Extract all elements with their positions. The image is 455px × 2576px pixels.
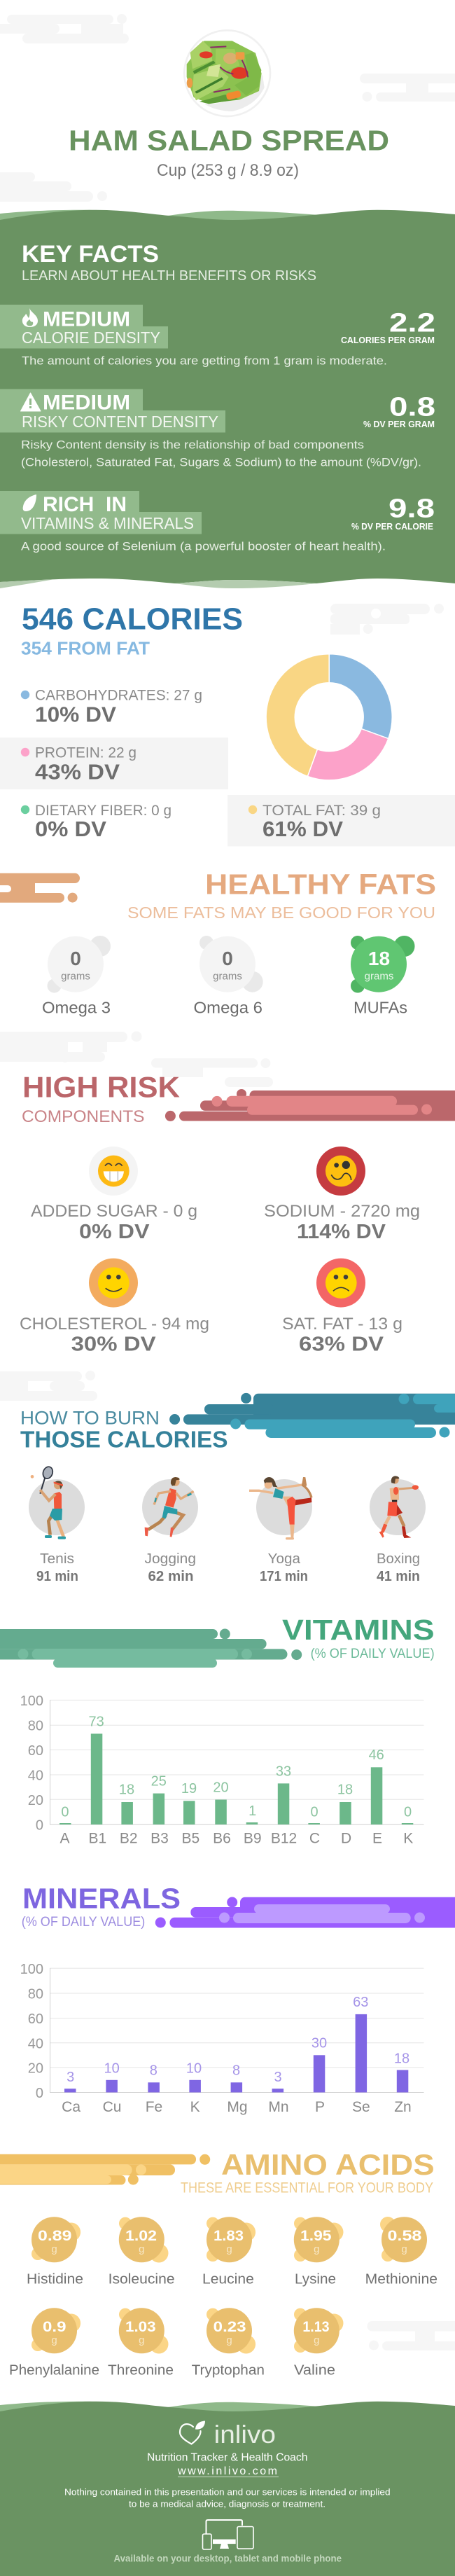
- bar chart: vitamins: B9: [244, 1831, 262, 1847]
- value: 9.8: [388, 494, 435, 524]
- bar chart: vitamins: B3: [150, 1831, 169, 1847]
- fat: mufas: [351, 936, 414, 1016]
- amino: histidine: [27, 2217, 83, 2287]
- stat: total fat: [248, 803, 381, 841]
- bar chart: vitamins: [20, 1694, 424, 1847]
- activity: tennis: [29, 1465, 85, 1539]
- component: cholesterol: 30% DV: [71, 1334, 156, 1356]
- stat: carbohydrates: 10% DV: [35, 702, 116, 727]
- bar chart: vitamins: 1: [248, 1803, 256, 1819]
- label: CALORIE DENSITY: [22, 328, 160, 347]
- stat: total fat: 61% DV: [262, 817, 343, 841]
- component: sodium: [264, 1147, 420, 1243]
- label: boxing: Boxing: [377, 1551, 420, 1567]
- bar chart: vitamins: B6: [213, 1831, 231, 1847]
- availability note: Available on your desktop, tablet and mobile phone: [113, 2554, 342, 2564]
- fat: omega 6: Omega 6: [193, 998, 262, 1016]
- heading: calories: 546 CALORIES: [22, 602, 243, 637]
- tagline: Nutrition Tracker & Health Coach: [147, 2451, 308, 2463]
- unit: CALORIES PER GRAM: [341, 335, 435, 345]
- bar chart: vitamins: A: [59, 1831, 70, 1847]
- fat: omega 6: [193, 936, 263, 1016]
- bar chart: minerals: Cu: [103, 2099, 121, 2115]
- amino: tryptophan: g: [226, 2334, 232, 2346]
- stat: carbohydrates: [21, 688, 202, 727]
- amino: phenylalanine: 0.9: [43, 2319, 66, 2335]
- bar chart: minerals: 8: [150, 2063, 158, 2079]
- bar chart: minerals: [20, 1962, 424, 2115]
- bar chart: vitamins: 60: [28, 1743, 43, 1759]
- label: RISKY CONTENT DENSITY: [22, 413, 218, 431]
- label: jogging: Jogging: [144, 1551, 196, 1567]
- bar chart: vitamins: 100: [20, 1694, 43, 1709]
- subheading: LEARN ABOUT HEALTH BENEFITS OR RISKS: [22, 268, 316, 284]
- amino: lysine: g: [314, 2243, 319, 2255]
- description: [21, 438, 421, 469]
- bar chart: minerals: 10: [104, 2061, 120, 2076]
- icon: flame: [22, 308, 38, 327]
- logo: heart and leaf: [180, 2421, 205, 2444]
- activity: boxing: [370, 1476, 426, 1538]
- heading: high risk: HIGH RISK: [22, 1070, 180, 1103]
- amino: threonine: 1.03: [125, 2319, 156, 2335]
- logo wordmark: inlivo: [214, 2420, 276, 2449]
- stat: carbohydrates: CARBOHYDRATES: 27 g: [35, 688, 202, 703]
- description: Risky Content density is the relationship of bad components: [21, 438, 364, 452]
- decorative cloud: amber: [0, 2154, 210, 2185]
- bar chart: minerals: 10: [186, 2061, 202, 2076]
- decorative cloud: teal: [169, 1393, 455, 1438]
- bar chart: minerals: K: [190, 2099, 200, 2115]
- label: jogging: 62 min: [148, 1569, 193, 1584]
- label: yoga: 171 min: [260, 1569, 308, 1584]
- amino: methionine: Methionine: [365, 2272, 438, 2287]
- bar chart: vitamins: 0: [36, 1818, 43, 1834]
- risky content block: [0, 389, 435, 469]
- bar chart: minerals: Mn: [268, 2099, 289, 2115]
- icon: devices: [203, 2520, 253, 2549]
- component: sodium: SODIUM - 2720 mg: [264, 1202, 420, 1221]
- fat: mufas: grams: [365, 971, 393, 983]
- bar chart: vitamins: 20: [28, 1793, 43, 1808]
- bar chart: vitamins: B1: [88, 1831, 106, 1847]
- bar chart: minerals: 60: [28, 2011, 43, 2027]
- fat: omega 6: grams: [213, 971, 242, 983]
- bar chart: vitamins: B2: [120, 1831, 138, 1847]
- bar chart: vitamins: 18: [119, 1782, 134, 1797]
- decorative cloud: red: [165, 1089, 455, 1121]
- heading: healthy fats: HEALTHY FATS: [205, 868, 436, 900]
- bar chart: vitamins: 19: [181, 1781, 197, 1796]
- amino: lysine: [294, 2217, 343, 2287]
- fat: mufas: MUFAs: [354, 998, 407, 1016]
- amino: threonine: [108, 2308, 174, 2378]
- amino: isoleucine: g: [139, 2243, 144, 2255]
- heading: minerals: MINERALS: [22, 1882, 181, 1914]
- description: A good source of Selenium (a powerful booster of heart health).: [21, 540, 386, 553]
- vitamins and minerals block: [0, 491, 435, 553]
- bar chart: vitamins: 40: [28, 1768, 43, 1783]
- heading: those calories: THOSE CALORIES: [20, 1426, 228, 1452]
- bar chart: minerals: Se: [352, 2099, 370, 2115]
- bar chart: minerals: 3: [274, 2070, 282, 2085]
- fat: omega 3: grams: [61, 971, 90, 983]
- panel: calories: [0, 602, 455, 846]
- amino: phenylalanine: g: [51, 2334, 57, 2346]
- component: added sugar: 0% DV: [79, 1221, 150, 1243]
- fat: mufas: 18: [368, 948, 390, 969]
- bar chart: minerals: 8: [232, 2063, 240, 2079]
- amino: valine: g: [314, 2334, 319, 2346]
- bar chart: minerals: 80: [28, 1986, 43, 2002]
- bar chart: vitamins: K: [403, 1831, 413, 1847]
- stat: dietary fiber: DIETARY FIBER: 0 g: [35, 803, 172, 819]
- bar chart: vitamins: 73: [88, 1715, 104, 1730]
- subheading: SOME FATS MAY BE GOOD FOR YOU: [127, 903, 435, 922]
- bar chart: minerals: 40: [28, 2036, 43, 2051]
- bar chart: vitamins: 18: [337, 1782, 353, 1797]
- decorative cloud: green: [0, 1629, 302, 1668]
- panel: high risk components: [20, 1070, 455, 1356]
- panel: how to burn calories: [20, 1393, 455, 1584]
- amino: isoleucine: Isoleucine: [108, 2272, 175, 2287]
- amino: leucine: 1.83: [214, 2228, 244, 2244]
- subheading: components: COMPONENTS: [22, 1107, 144, 1126]
- amino: valine: Valine: [294, 2363, 335, 2378]
- amino: tryptophan: Tryptophan: [192, 2363, 265, 2378]
- bar chart: minerals: 18: [394, 2051, 410, 2066]
- label: yoga: [260, 1551, 308, 1584]
- bar chart: vitamins: 25: [151, 1773, 167, 1789]
- amino: isoleucine: 1.02: [125, 2228, 157, 2244]
- component: saturated fat: SAT. FAT - 13 g: [282, 1315, 402, 1334]
- fat: omega 3: 0: [70, 948, 81, 969]
- label: jogging: [144, 1551, 196, 1584]
- unit: % DV PER GRAM: [363, 420, 435, 429]
- component: saturated fat: 63% DV: [299, 1334, 384, 1356]
- panel: key facts: [0, 210, 455, 588]
- description: (Cholesterol, Saturated Fat, Sugars & Sodium) to the amount (%DV/gr).: [21, 455, 421, 469]
- icon: warning: [21, 393, 41, 411]
- bar chart: vitamins: C: [309, 1831, 320, 1847]
- label: boxing: [377, 1551, 420, 1584]
- label: boxing: 41 min: [377, 1569, 420, 1584]
- component: cholesterol: CHOLESTEROL - 94 mg: [20, 1315, 209, 1334]
- fat: omega 3: Omega 3: [42, 998, 111, 1016]
- stat: dietary fiber: [21, 803, 172, 841]
- amino: valine: [294, 2308, 343, 2378]
- decorative cloud: orange: [0, 873, 80, 903]
- bar chart: minerals: 63: [353, 1995, 368, 2010]
- amino: histidine: 0.89: [38, 2228, 71, 2244]
- value: 0.8: [389, 393, 435, 422]
- amino: tryptophan: 0.23: [214, 2319, 246, 2335]
- label: tenis: 91 min: [36, 1569, 78, 1584]
- bar chart: vitamins: 33: [276, 1764, 291, 1779]
- bar chart: minerals: Ca: [62, 2099, 80, 2115]
- calorie density block: [0, 305, 435, 367]
- amino: lysine: 1.95: [300, 2228, 332, 2244]
- unit: % DV PER CALORIE: [351, 522, 433, 532]
- bar chart: vitamins: B5: [182, 1831, 200, 1847]
- amino: methionine: g: [401, 2243, 407, 2255]
- amino: threonine: Threonine: [108, 2363, 174, 2378]
- value: 2.2: [389, 308, 435, 338]
- fat: omega 6: 0: [222, 948, 233, 969]
- component: cholesterol: [20, 1259, 209, 1356]
- panel: footer: [0, 2402, 455, 2576]
- amino: leucine: g: [226, 2243, 232, 2255]
- bar chart: minerals: Fe: [146, 2099, 162, 2115]
- bar chart: vitamins: B12: [271, 1831, 297, 1847]
- bar chart: vitamins: 20: [213, 1780, 229, 1796]
- amino: methionine: 0.58: [388, 2228, 422, 2244]
- stat: dietary fiber: 0% DV: [35, 817, 106, 841]
- component: sodium: 114% DV: [297, 1221, 386, 1243]
- amino: histidine: Histidine: [27, 2272, 83, 2287]
- stat: protein: [21, 745, 136, 784]
- bar chart: minerals: 0: [36, 2086, 43, 2101]
- subheading: (% OF DAILY VALUE): [22, 1915, 145, 1930]
- subheading: (% OF DAILY VALUE): [311, 1647, 435, 1661]
- disclaimer: [64, 2486, 391, 2509]
- title: HAM SALAD SPREAD: [69, 125, 389, 157]
- amino: phenylalanine: [9, 2308, 99, 2378]
- website link: www.inlivo.com: [177, 2465, 277, 2477]
- donut chart: [266, 654, 392, 780]
- fat: omega 3: [42, 936, 111, 1016]
- label: tenis: [36, 1551, 78, 1584]
- heading: how to burn: HOW TO BURN: [20, 1408, 160, 1429]
- bar chart: minerals: 3: [66, 2070, 74, 2085]
- bar chart: vitamins: D: [341, 1831, 351, 1847]
- amino: histidine: g: [51, 2243, 57, 2255]
- bar chart: minerals: 100: [20, 1962, 43, 1977]
- icon: leaf: [23, 494, 36, 511]
- disclaimer: to be a medical advice, diagnosis or treatment.: [129, 2498, 326, 2509]
- stat: total fat: TOTAL FAT: 39 g: [262, 803, 381, 819]
- amino: phenylalanine: Phenylalanine: [9, 2363, 99, 2378]
- activity: yoga: [249, 1477, 312, 1539]
- stat: protein: 43% DV: [35, 759, 120, 784]
- serving size: Cup (253 g / 8.9 oz): [157, 161, 299, 180]
- subheading: from fat: 354 FROM FAT: [21, 637, 150, 658]
- bar chart: vitamins: 46: [369, 1747, 384, 1763]
- label: VITAMINS & MINERALS: [21, 514, 194, 532]
- component: added sugar: [31, 1147, 197, 1243]
- heading: key facts: KEY FACTS: [22, 241, 159, 268]
- bar chart: minerals: Mg: [227, 2099, 248, 2115]
- description: The amount of calories you are getting from 1 gram is moderate.: [22, 354, 387, 367]
- decorative cloud: purple: [155, 1897, 455, 1927]
- component: saturated fat: [282, 1259, 402, 1356]
- activity: jogging: [142, 1477, 198, 1537]
- bar chart: minerals: P: [315, 2099, 325, 2115]
- amino: threonine: g: [139, 2334, 144, 2346]
- heading: amino acids: AMINO ACIDS: [221, 2148, 435, 2181]
- amino: leucine: [202, 2217, 255, 2287]
- bar chart: minerals: 20: [28, 2061, 43, 2076]
- bar chart: vitamins: E: [372, 1831, 382, 1847]
- panel: minerals: [20, 1882, 455, 2115]
- heading: vitamins: VITAMINS: [282, 1614, 435, 1646]
- amino: leucine: Leucine: [202, 2272, 254, 2287]
- bar chart: minerals: 30: [312, 2036, 327, 2051]
- amino: lysine: Lysine: [295, 2272, 336, 2287]
- bar chart: vitamins: 0: [61, 1805, 69, 1820]
- amino: valine: 1.13: [302, 2319, 330, 2335]
- food image: salad plate: [184, 30, 270, 116]
- label: tenis: Tenis: [40, 1551, 74, 1567]
- bar chart: minerals: Zn: [394, 2099, 412, 2115]
- disclaimer: Nothing contained in this presentation and our services is intended or implied: [64, 2486, 391, 2497]
- component: added sugar: ADDED SUGAR - 0 g: [31, 1202, 197, 1221]
- panel: vitamins: [0, 1614, 435, 1847]
- panel: amino acids: [0, 2148, 438, 2378]
- rating: RICH IN: [43, 493, 127, 516]
- rating: MEDIUM: [43, 392, 130, 415]
- amino: isoleucine: [108, 2217, 175, 2287]
- bar chart: vitamins: 80: [28, 1719, 43, 1734]
- rating: MEDIUM: [43, 308, 130, 331]
- label: yoga: Yoga: [268, 1551, 301, 1567]
- bar chart: vitamins: 0: [404, 1805, 412, 1820]
- stat: protein: PROTEIN: 22 g: [35, 745, 136, 761]
- amino: methionine: [365, 2217, 438, 2287]
- bar chart: vitamins: 0: [310, 1805, 318, 1820]
- panel: healthy fats: [0, 868, 436, 1016]
- amino: tryptophan: [192, 2308, 265, 2378]
